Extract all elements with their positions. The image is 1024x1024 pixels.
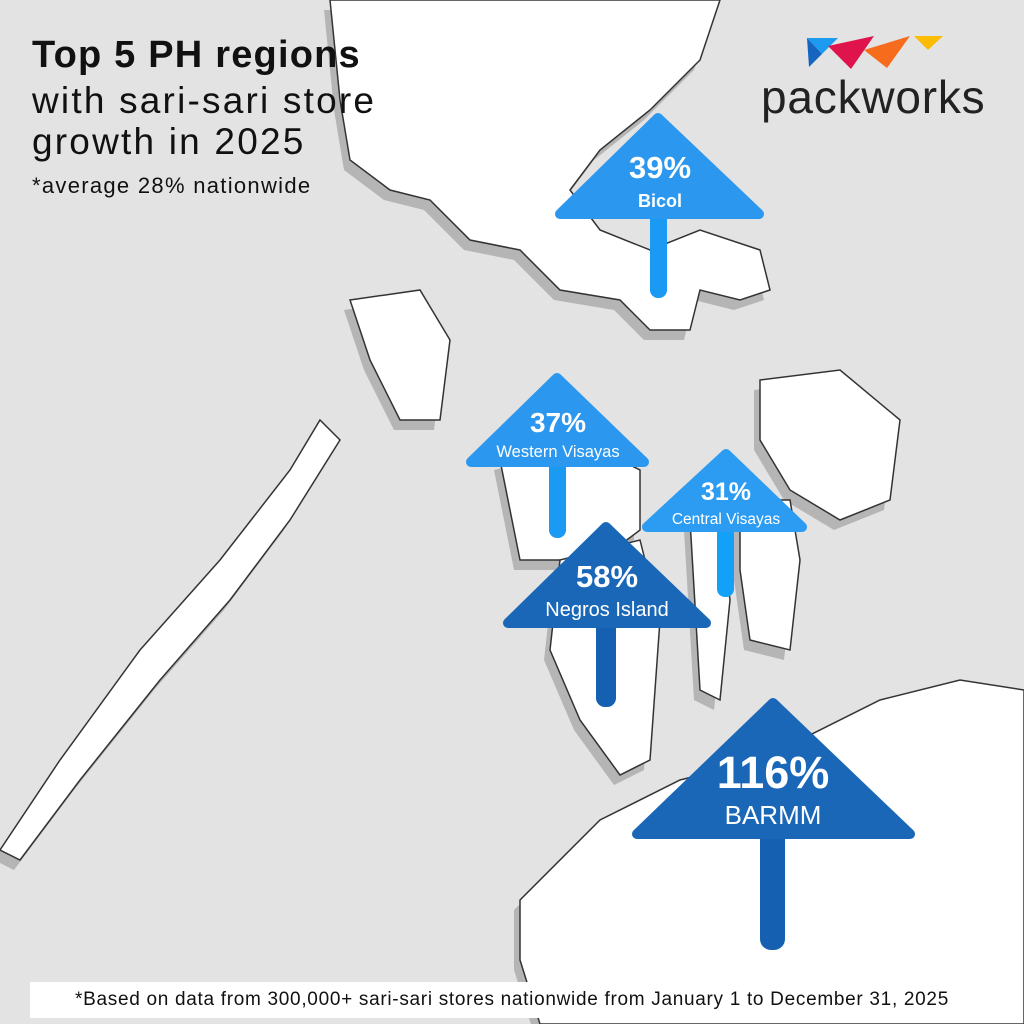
logo icon: [807, 36, 943, 69]
subtitle: with sari-sari store: [32, 80, 376, 121]
arrow: Western Visayas: [471, 378, 644, 538]
arrow: Central Visayas: 31%: [701, 478, 751, 506]
arrow: BARMM: BARMM: [725, 800, 821, 830]
footer: [30, 982, 994, 1018]
arrow: BARMM: 116%: [717, 747, 829, 798]
arrow: Central Visayas: Central Visayas: [672, 511, 780, 528]
arrow: BARMM: [637, 703, 910, 950]
arrow: Negros Island: 58%: [576, 559, 638, 594]
arrow: Bicol: Bicol: [638, 191, 682, 211]
logo text: packworks: [761, 71, 986, 123]
arrow: Central Visayas: [647, 454, 802, 597]
arrow: Negros Island: [508, 527, 706, 707]
title: Top 5 PH regions: [32, 34, 361, 76]
arrow: Western Visayas: 37%: [530, 407, 586, 438]
arrow: Western Visayas: Western Visayas: [496, 443, 620, 461]
footer: *Based on data from 300,000+ sari-sari stores nationwide from January 1 to December 31, 2025: [75, 989, 949, 1010]
arrow: Bicol: 39%: [629, 150, 691, 185]
arrow: Bicol: [560, 118, 759, 298]
arrow: Negros Island: Negros Island: [545, 599, 669, 621]
note: *average 28% nationwide: [32, 173, 311, 198]
subtitle: [32, 80, 376, 162]
subtitle: growth in 2025: [32, 121, 306, 162]
